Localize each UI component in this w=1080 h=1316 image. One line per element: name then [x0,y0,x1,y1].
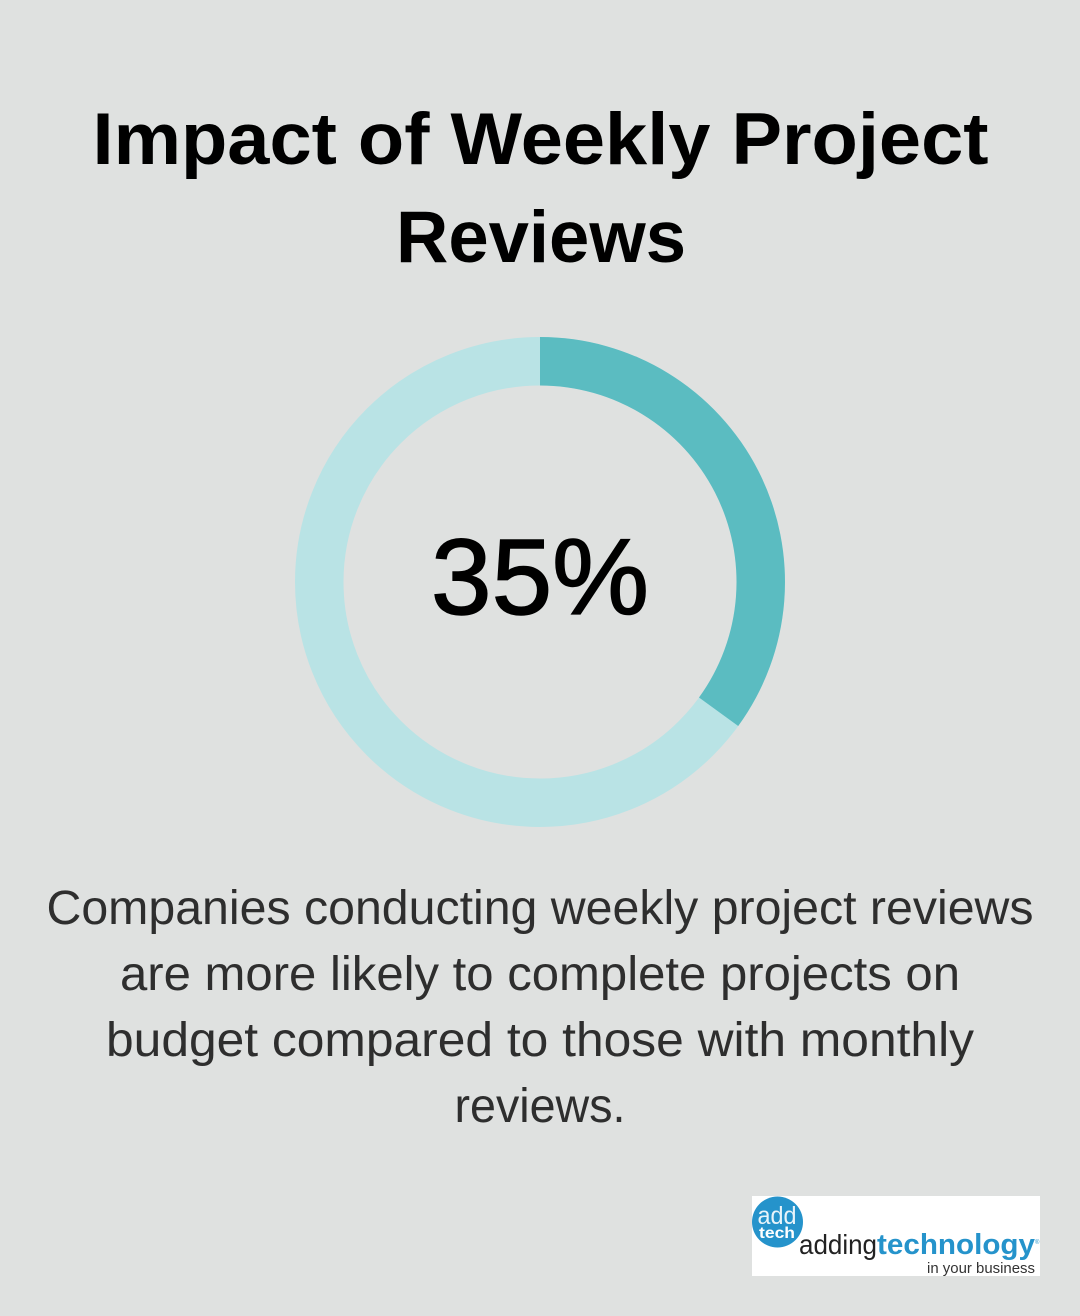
logo: adding technology: adding [799,1229,877,1260]
logo: adding technology [752,1196,1040,1277]
logo: adding technology: technology [877,1229,1035,1261]
logo: adding technology: tech [759,1225,795,1242]
description text: reviews. [454,1080,626,1133]
logo: adding technology: in your business [927,1260,1035,1277]
percentage value: 35% [431,516,649,637]
description text [46,882,1034,1133]
title: Impact of Weekly Project [92,99,989,180]
logo: adding technology: ® [1035,1239,1040,1246]
description text: Companies conducting weekly project reviews [46,882,1034,935]
donut chart: 35% [319,337,785,803]
title [92,99,989,278]
description text: are more likely to complete projects on [120,948,960,1001]
description text: budget compared to those with monthly [106,1014,974,1067]
title: Reviews [396,197,686,278]
logo: adding technology: add [758,1202,796,1230]
